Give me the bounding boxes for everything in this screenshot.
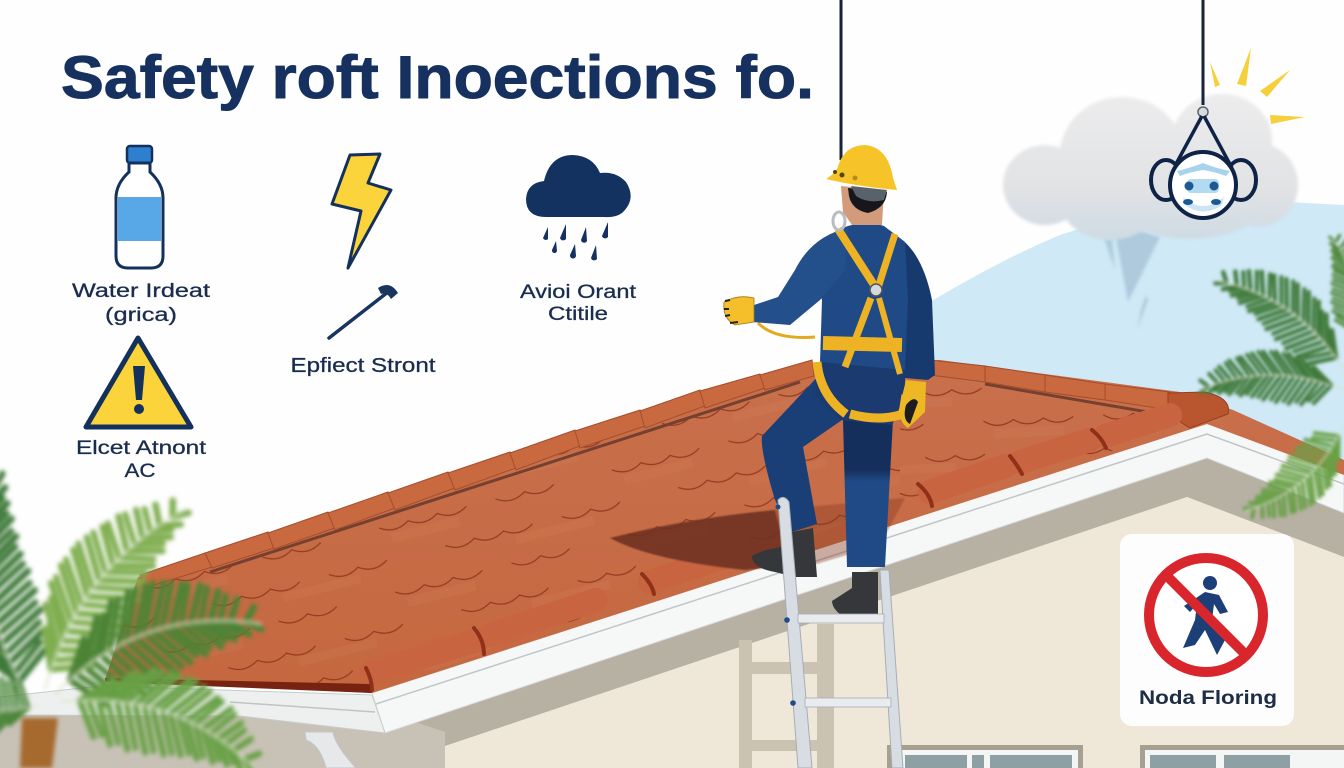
eave roll tiles	[366, 415, 1170, 690]
label: alert: Elcet Atnont	[76, 438, 207, 459]
safety lines	[841, 0, 1203, 160]
frond: upper light	[0, 469, 206, 705]
label: sign: Noda Floring	[1139, 688, 1277, 709]
rope	[758, 323, 815, 337]
icon: sun rays	[1210, 48, 1305, 124]
wall shadow band	[385, 458, 1344, 746]
distant blue hill	[925, 200, 1344, 490]
hair	[848, 188, 887, 213]
torso	[808, 223, 908, 370]
man shadow	[610, 510, 790, 570]
ladder shadow	[739, 624, 834, 768]
icon: lightning bolt	[332, 154, 391, 268]
ridge end cap	[1168, 392, 1229, 428]
right leg	[830, 372, 905, 567]
roof	[105, 360, 1344, 693]
house wall	[445, 497, 1344, 768]
icon: rain cloud	[526, 155, 631, 260]
label: alert: AC	[124, 461, 156, 482]
storm cloud	[1003, 94, 1298, 330]
left glove	[724, 297, 754, 325]
frond: lower light	[52, 641, 277, 768]
label: water: Water Irdeat	[72, 281, 211, 302]
icon: warning triangle	[86, 338, 191, 427]
ridge tiles	[140, 360, 1170, 588]
eave underside	[105, 678, 372, 693]
window left	[887, 745, 1083, 768]
ladder	[776, 497, 903, 768]
hip	[815, 362, 905, 425]
label: alert	[76, 438, 207, 482]
icon: nail	[329, 285, 398, 338]
right arm	[895, 235, 935, 380]
frond: low	[1236, 414, 1344, 540]
label: avoid: Avioi Orant	[520, 282, 637, 303]
panel: no walking sign	[1120, 534, 1294, 726]
frond: middle	[1199, 352, 1344, 404]
frond: top	[1207, 245, 1344, 383]
ridge shadow line	[210, 382, 1165, 572]
label: water	[72, 281, 211, 326]
harness	[817, 229, 906, 418]
chest ring	[870, 284, 882, 296]
title: Safety roft Inoections fo.	[61, 44, 814, 111]
hat band	[851, 186, 887, 201]
icon: water bottle	[116, 146, 163, 268]
left side wall	[0, 712, 445, 768]
right glove	[900, 380, 926, 428]
frond: middle dark	[31, 554, 271, 721]
right boot	[832, 572, 878, 622]
label: water: (grica)	[105, 305, 177, 326]
window right	[1140, 745, 1344, 768]
trunk	[20, 718, 58, 768]
label: avoid	[520, 282, 637, 325]
carabiner	[833, 212, 845, 230]
label: effect: Epfiect Stront	[290, 355, 436, 377]
front gutter	[0, 686, 385, 733]
fascia board	[372, 423, 1344, 733]
frond: small left	[0, 659, 44, 748]
glove palm	[905, 399, 918, 424]
hard hat	[826, 145, 897, 190]
icon: hanging mask	[1151, 107, 1256, 218]
downspout	[305, 732, 356, 768]
frond: far left	[0, 469, 54, 709]
neck	[841, 186, 884, 225]
right palm	[1199, 230, 1344, 540]
label: avoid: Ctitile	[548, 304, 608, 325]
left palm	[0, 469, 277, 768]
icon: prohibited person	[1149, 558, 1263, 672]
left leg	[762, 372, 842, 532]
left arm	[752, 228, 848, 325]
worker	[724, 145, 935, 622]
left boot	[752, 528, 817, 577]
frond: edge	[1320, 230, 1344, 342]
